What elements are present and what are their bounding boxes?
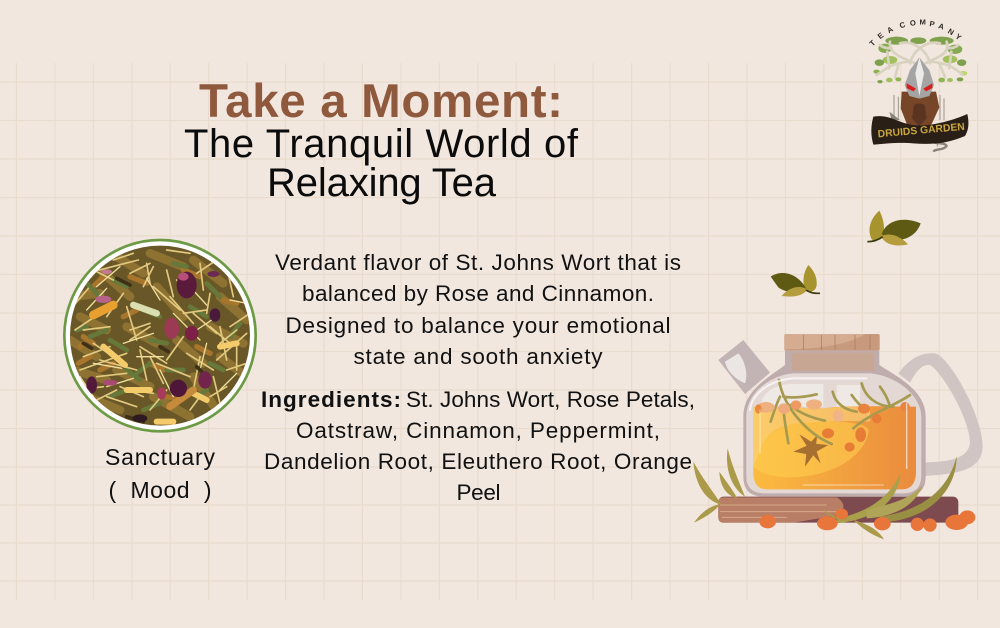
liquid highlight [753, 421, 869, 477]
berries in tea [755, 399, 910, 452]
arc text: T [868, 38, 878, 48]
ingredients text: Peel [456, 480, 500, 505]
banner text: DRUIDS GARDEN [877, 122, 965, 140]
description text [275, 250, 681, 369]
arc text: A [937, 21, 946, 32]
arc text: A [885, 24, 895, 35]
ingredients text: Oatstraw, Cinnamon, Peppermint, [296, 418, 660, 443]
ingredients text [261, 387, 695, 505]
ingredients text: St. Johns Wort, Rose Petals, [406, 387, 695, 412]
description text: Verdant flavor of St. Johns Wort that is [275, 250, 681, 275]
arc text: M [919, 18, 926, 27]
arc text: Y [954, 32, 963, 42]
glass reflections [750, 378, 907, 485]
arc text: P [929, 19, 935, 29]
glass body [743, 351, 926, 497]
ingredients text: Dandelion Root, Eleuthero Root, Orange [264, 449, 692, 474]
logo: Druids Garden tea company [868, 18, 968, 152]
glass windows above liquid [760, 384, 860, 407]
berries on stand [759, 509, 975, 532]
subheading line two: Relaxing Tea [267, 161, 497, 205]
icon: lower floating leaves [771, 265, 820, 297]
icon: upper floating leaves [867, 211, 921, 245]
tea blend caption: Sanctuary [105, 444, 216, 470]
herb sprigs in tea [771, 380, 910, 444]
description text: state and sooth anxiety [354, 344, 603, 369]
tree foliage [873, 37, 967, 83]
description text: Designed to balance your emotional [286, 313, 670, 338]
tea blend photo in circle [64, 240, 256, 431]
liquid [753, 406, 916, 489]
subheading line one: The Tranquil World of [184, 122, 579, 166]
star anise [793, 434, 828, 467]
helmet and bearded face [901, 57, 939, 133]
arc text: E [876, 31, 885, 41]
description text: balanced by Rose and Cinnamon. [302, 281, 654, 306]
wooden stand [718, 497, 958, 523]
illustration: glass teapot with sea buckthorn tea [693, 334, 983, 539]
tea blend caption [105, 444, 216, 503]
heading: Take a Moment: Take a Moment: [199, 75, 563, 128]
tea blend caption: ( Mood ) [108, 477, 212, 503]
handle [898, 353, 983, 476]
arc text: O [909, 18, 917, 28]
arc text: C [898, 20, 907, 30]
wooden lid [784, 334, 880, 371]
arc text: N [946, 27, 956, 37]
sea buckthorn branches [693, 448, 957, 539]
vertical hatch behind face [894, 95, 944, 147]
title [184, 75, 579, 205]
spout [718, 340, 770, 394]
antlers [877, 42, 963, 77]
ingredients text: Ingredients: [261, 387, 401, 412]
liquid top band [753, 407, 870, 467]
